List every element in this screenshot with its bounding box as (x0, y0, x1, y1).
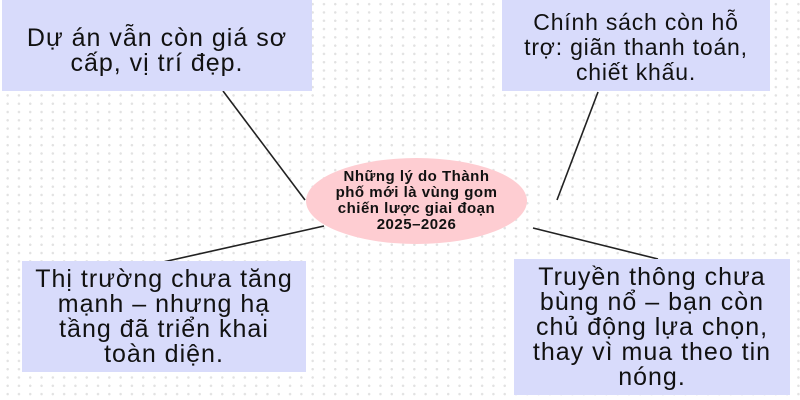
box: top-left (2, 0, 312, 91)
center ellipse: phố mới là vùng gom (336, 184, 497, 201)
box: bottom-left: mạnh – nhưng hạ (58, 290, 270, 318)
center ellipse: chiến lược giai đoạn (338, 200, 495, 217)
box: top-left: Dự án vẫn còn giá sơ (27, 24, 287, 52)
box: top-right: chiết khấu. (576, 58, 696, 84)
box: bottom-right: thay vì mua theo tin (533, 338, 771, 366)
center ellipse: Những lý do Thành (343, 168, 490, 185)
center ellipse (306, 158, 527, 244)
box: top-right: trợ: giãn thanh toán, (524, 34, 748, 60)
box: bottom-left (22, 261, 306, 372)
box: top-left: cấp, vị trí đẹp. (70, 48, 244, 76)
box: bottom-right (514, 259, 790, 395)
box: bottom-left: tầng đã triển khai (59, 314, 269, 342)
box: bottom-left: Thị trường chưa tăng (35, 264, 293, 292)
box: top-right (502, 0, 770, 91)
box: top-right: Chính sách còn hỗ (533, 8, 739, 34)
box: bottom-left: toàn diện. (104, 340, 224, 368)
box: bottom-right: nóng. (618, 362, 686, 390)
box: bottom-right: chủ động lựa chọn, (536, 312, 768, 340)
box: bottom-right: Truyền thông chưa (538, 262, 766, 290)
box: bottom-right: bùng nổ – bạn còn (540, 288, 764, 316)
center ellipse: 2025–2026 (377, 216, 456, 233)
